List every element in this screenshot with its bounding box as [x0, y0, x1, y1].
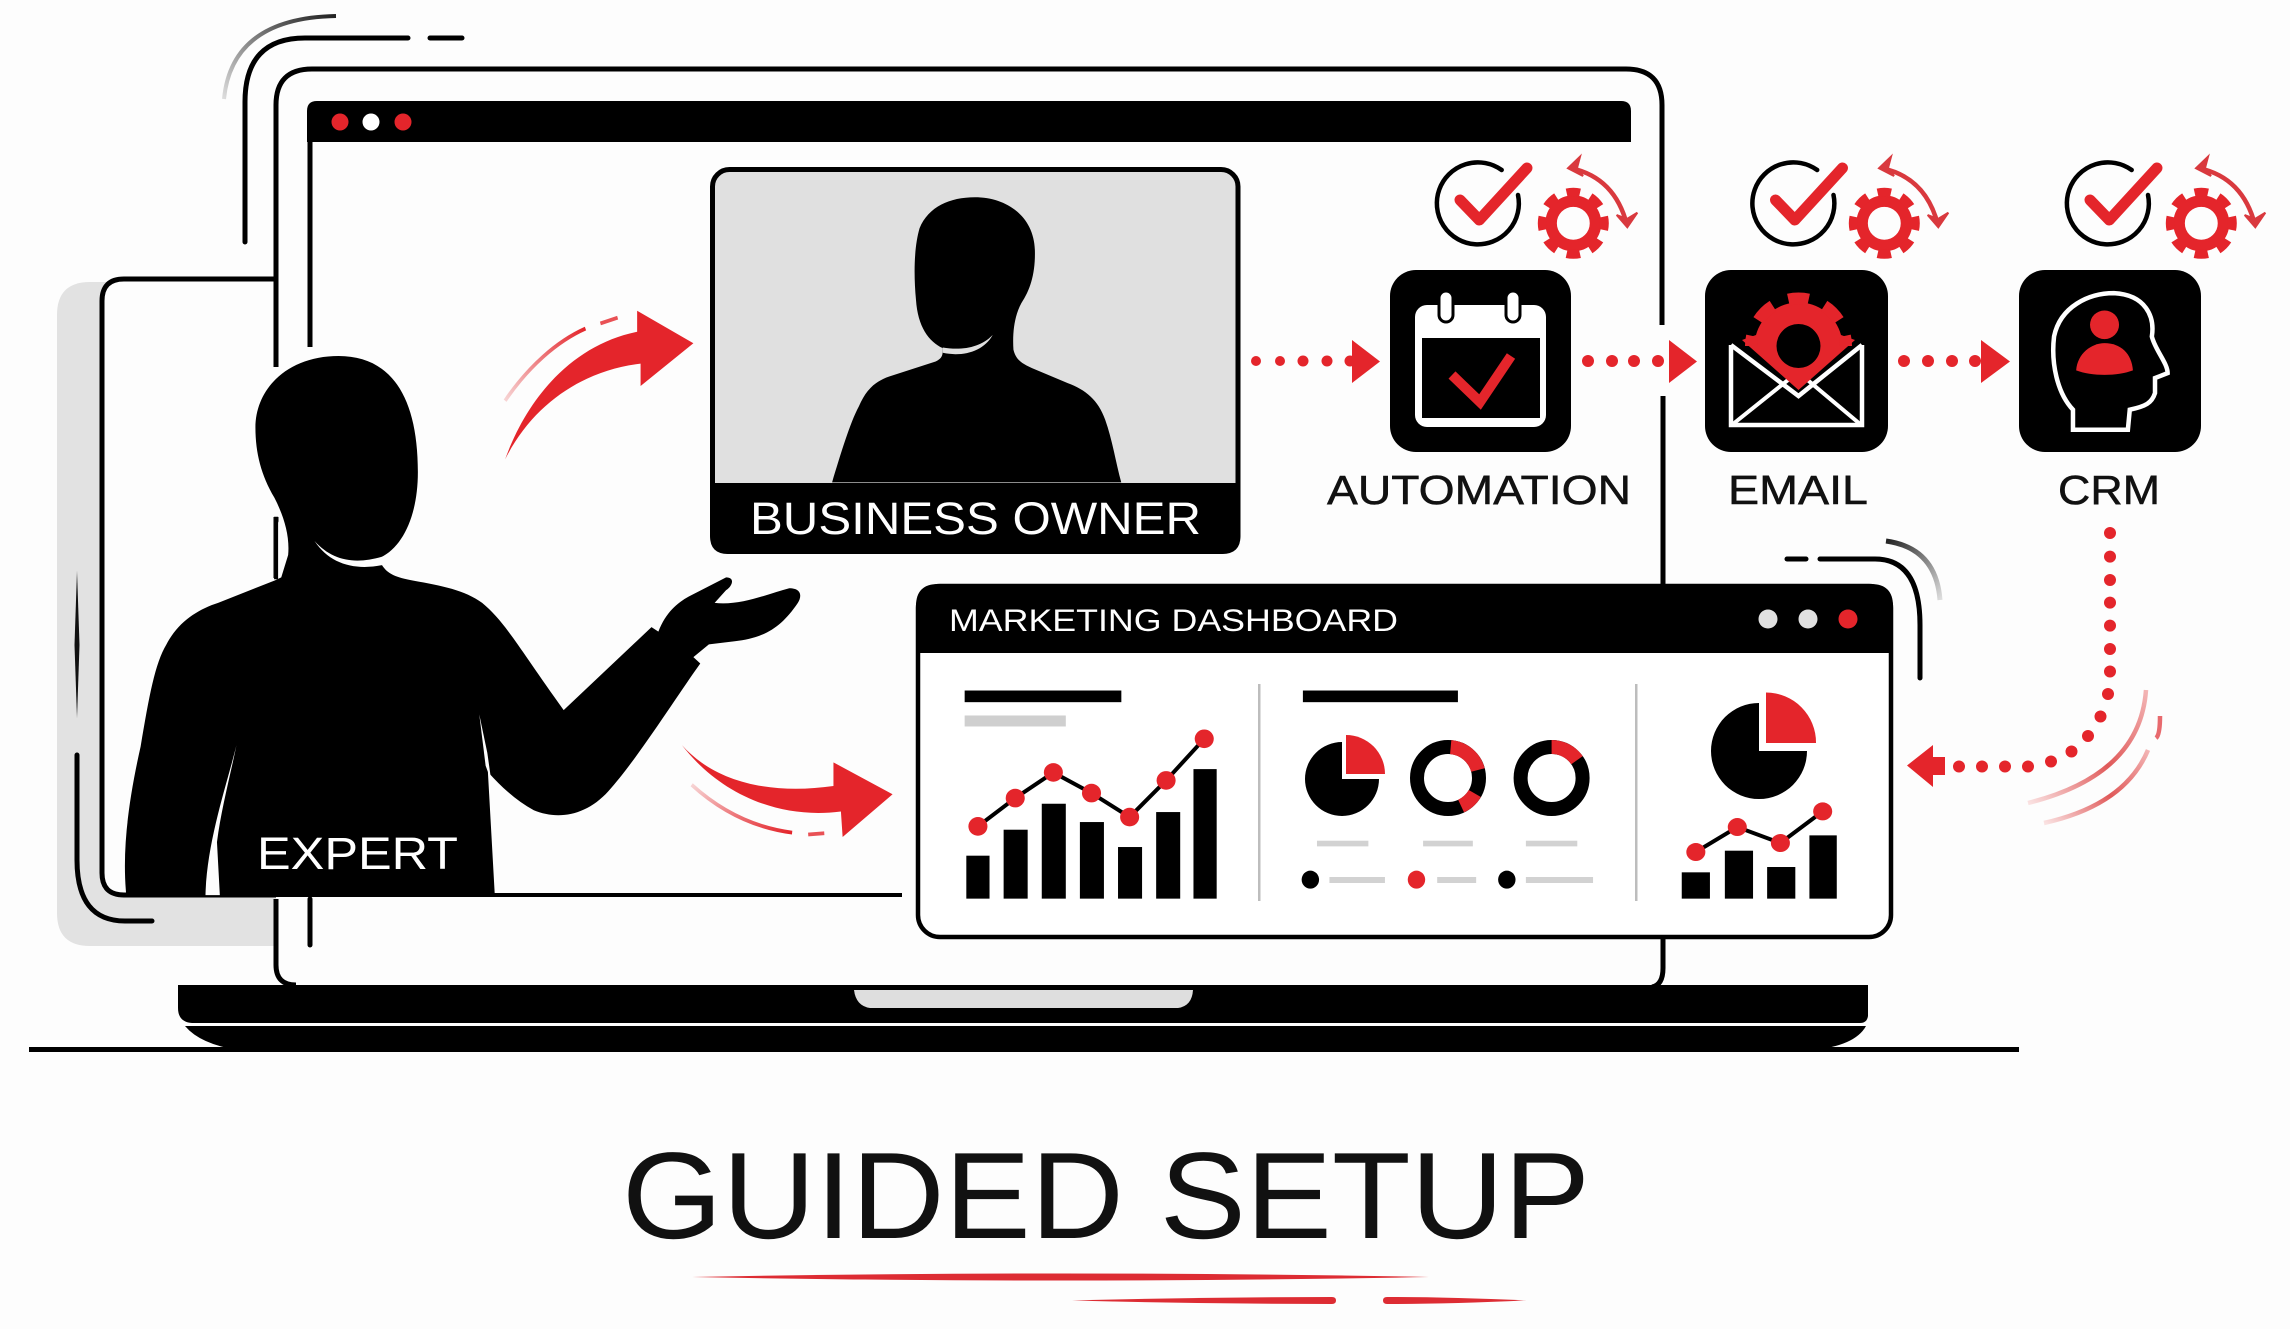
- pie and donut charts: [1305, 735, 1583, 816]
- label: business owner: BUSINESS OWNER: [750, 493, 1201, 544]
- decorative motion lines near crm arrow: [2028, 690, 2160, 823]
- expert camera panel: [57, 279, 276, 946]
- panel: business owner video tile: [710, 170, 1240, 554]
- icon: email with gear: [1705, 270, 1888, 452]
- label: automation: AUTOMATION: [1327, 467, 1631, 513]
- business owner silhouette: [832, 197, 1121, 482]
- panel: marketing dashboard: [916, 584, 1893, 937]
- label: expert: EXPERT: [257, 828, 458, 879]
- status icons: automation: [1437, 157, 1637, 254]
- dotted arrow: automation to email: [1582, 340, 1697, 383]
- decorative motion lines top right of dashboard: [1787, 541, 1940, 678]
- expert silhouette: [125, 356, 800, 895]
- label: email: EMAIL: [1728, 467, 1868, 513]
- large pie chart: [1711, 692, 1816, 799]
- laptop: [29, 69, 2019, 1050]
- arrow: expert to dashboard: [682, 745, 893, 837]
- icon: automation calendar: [1390, 270, 1571, 452]
- status icons: email: [1752, 157, 1948, 254]
- dotted arrow: crm to dashboard: [1907, 527, 2116, 787]
- decorative motion lines top left: [224, 16, 462, 242]
- legend rows: [1302, 691, 1593, 889]
- title: GUIDED SETUP: [622, 1128, 1590, 1265]
- window controls: [1758, 610, 1858, 628]
- title underline: [692, 1274, 1526, 1304]
- dotted arrow: business owner to automation: [1251, 340, 1380, 383]
- dashboard title: MARKETING DASHBOARD: [949, 602, 1398, 638]
- status icons: crm: [2067, 157, 2265, 254]
- small bar and line chart: [1682, 802, 1837, 899]
- browser window bar: [125, 101, 1631, 945]
- arrow: expert to business owner: [505, 311, 693, 459]
- label: crm: CRM: [2058, 467, 2160, 513]
- column dividers: [1258, 684, 1638, 901]
- icon: crm head: [2019, 270, 2201, 452]
- dotted arrow: email to crm: [1898, 340, 2010, 383]
- bar and line chart: [965, 691, 1217, 899]
